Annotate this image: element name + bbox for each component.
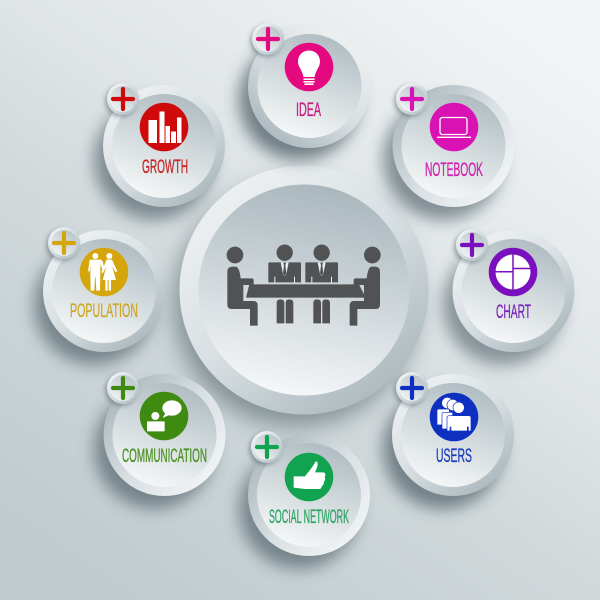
label: CHART [496,302,531,323]
label: COMMUNICATION [122,446,207,467]
icon: light bulb [285,43,333,91]
icon: man and woman [80,248,128,296]
panel: chart [443,229,574,365]
plus badge [46,227,80,261]
panel: social network: SOCIAL NETWORK [269,507,349,528]
icon: pie chart [489,248,537,296]
icon: people meeting around a table [227,244,381,326]
label: USERS [436,446,472,467]
panel: communication [94,372,226,509]
panel: population [34,227,165,365]
label: POPULATION [70,301,138,322]
icon: thumbs up [285,453,333,501]
plus badge [249,431,283,465]
icon: bar chart [140,103,188,151]
plus badge [394,372,428,406]
plus badge [105,372,139,406]
panel: idea [239,23,370,160]
icon: user group [430,393,478,441]
panel: social network [239,431,370,569]
panel: central meeting circle [174,166,428,426]
plus badge [105,83,139,117]
plus badge [394,83,428,117]
icon: laptop [430,103,478,151]
panel: users [383,372,514,509]
label: GROWTH [142,157,188,178]
icon: speech bubble and person [140,392,188,440]
panel: growth [94,83,225,220]
plus badge [250,23,284,57]
label: NOTEBOOK [425,160,483,181]
label: IDEA [296,100,321,121]
plus badge [454,229,488,263]
panel: notebook [383,83,514,220]
